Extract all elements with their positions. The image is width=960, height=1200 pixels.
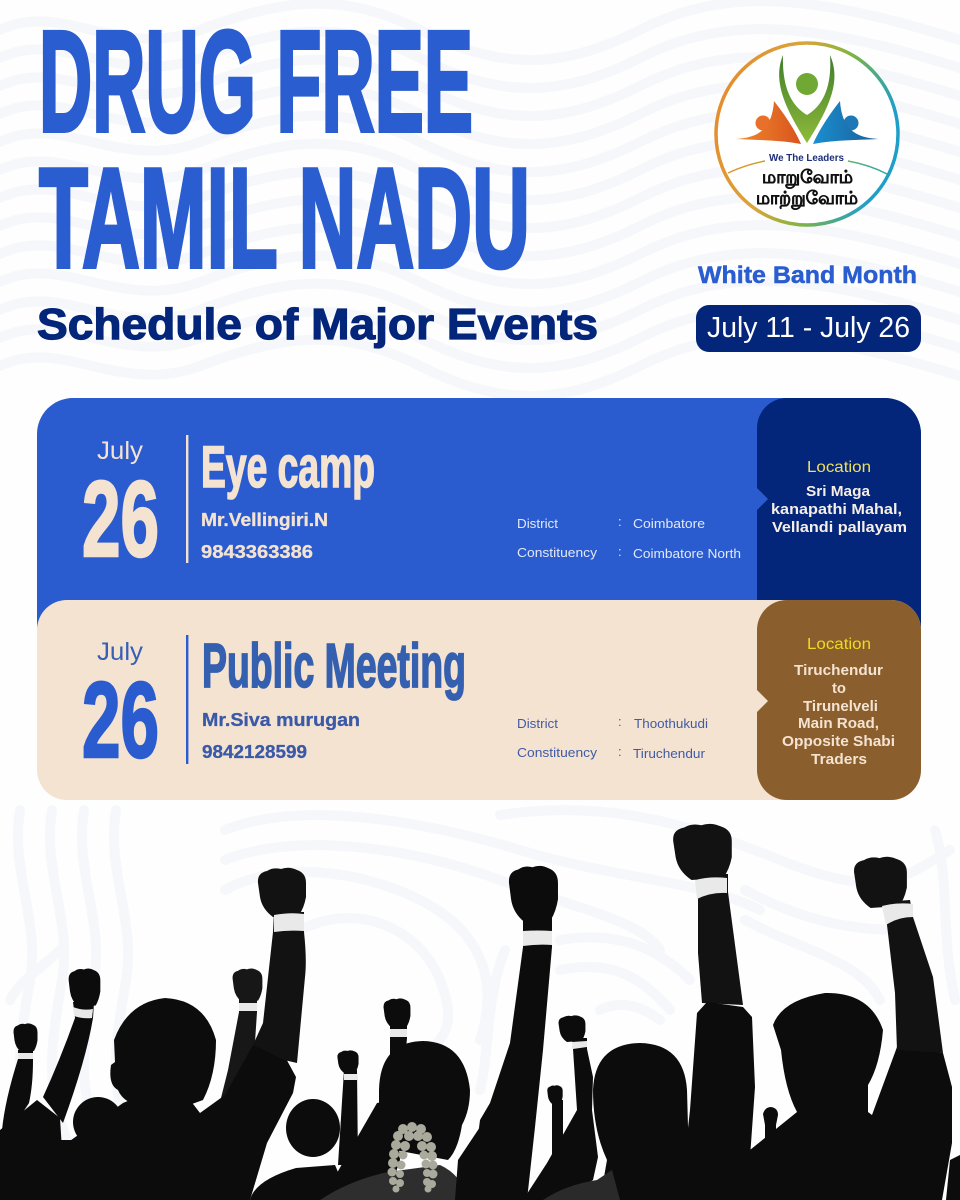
location text: Traders [811, 751, 867, 768]
subtitle: schedule of major events: Schedule of Major Events [37, 300, 598, 349]
panel: public meeting [37, 600, 921, 800]
location text [771, 459, 907, 536]
contact: Mr.Siva murugan [202, 710, 360, 730]
blue card background [37, 398, 921, 660]
location text: Tiruchendur [794, 662, 883, 679]
location text: Location [807, 459, 871, 476]
location text: kanapathi Mahal, [771, 501, 902, 518]
main man head [110, 998, 216, 1112]
location text: Vellandi pallayam [772, 519, 907, 536]
location tab background [757, 398, 921, 660]
logo: We The Leaders [716, 43, 898, 225]
district details [517, 514, 741, 561]
district details: District [517, 516, 558, 531]
district details [517, 714, 708, 761]
location text: Opposite Shabi [782, 733, 895, 750]
district details: Constituency [517, 545, 598, 560]
beige card background [37, 600, 921, 800]
district details: Constituency [517, 745, 598, 760]
hair between shoulders [455, 1127, 495, 1200]
edge figure [946, 1155, 960, 1200]
sleeve right of second woman [680, 1002, 755, 1200]
logo ring [716, 43, 898, 225]
far left arm and fist [2, 1023, 38, 1135]
event name: Eye camp [201, 435, 375, 500]
second woman head and body [593, 1043, 690, 1200]
logo Tamil text: மாற்றுவோம் [756, 188, 858, 210]
district details: : [618, 514, 622, 529]
panel: eye camp [37, 398, 921, 660]
title: Drug Free Tamil Nadu [39, 1, 530, 298]
far right raised arm and fist [854, 857, 943, 1053]
contact [202, 710, 360, 762]
logo figure: blue right [813, 101, 879, 144]
location text: Tirunelveli [803, 698, 878, 715]
second woman shoulder [543, 1170, 620, 1200]
small fist arm [523, 1015, 598, 1200]
title: Drug Free Tamil Nadu: TAMIL NADU [39, 139, 530, 298]
district details: Thoothukudi [634, 716, 708, 731]
district details: District [517, 716, 558, 731]
crowd silhouette with raised fists and white bands [0, 824, 960, 1200]
flower garland [388, 1122, 438, 1192]
right man body [745, 1047, 952, 1200]
date: July 26 [82, 638, 159, 780]
date: July 26 [82, 437, 159, 579]
district details: Coimbatore [633, 516, 705, 531]
central fist arm [384, 998, 410, 1060]
event name: Public Meeting [202, 632, 466, 701]
contact: Mr.Vellingiri.N [201, 510, 328, 530]
right man head [773, 993, 883, 1115]
heading: white band month: White Band Month [698, 262, 917, 289]
district details: : [618, 544, 622, 559]
contact [201, 510, 328, 562]
location tab background [757, 600, 921, 800]
woman head [379, 1041, 470, 1160]
white wrist bands [18, 877, 913, 1080]
contact: 9842128599 [202, 742, 307, 762]
district details: Coimbatore North [633, 546, 741, 561]
district details: Tiruchendur [633, 746, 706, 761]
location text [782, 636, 895, 768]
date: July 26: 26 [82, 458, 159, 579]
main raised arm and fist [253, 868, 306, 1063]
date pill: July 11 - July 26 [707, 312, 910, 344]
logo figure: orange left [735, 101, 801, 144]
date: July 26: 26 [82, 659, 159, 780]
tiny far fist [547, 1085, 563, 1157]
right raised arm and fist [673, 824, 743, 1005]
location text: Sri Maga [806, 483, 871, 500]
small central arm [337, 1050, 359, 1165]
main man body [20, 1045, 296, 1200]
district details: : [618, 744, 622, 759]
location text: Location [807, 636, 871, 653]
tiny right fist [763, 1107, 778, 1150]
district details: : [618, 714, 622, 729]
date: July 26: July [97, 437, 144, 465]
logo Tamil text [756, 167, 858, 210]
logo figure: green centre [779, 55, 834, 143]
contact: 9843363386 [201, 542, 313, 562]
left sleeve and small head [0, 1097, 125, 1200]
date: July 26: July [97, 638, 144, 666]
left arm and fist [43, 969, 100, 1123]
sleeve behind woman [325, 1100, 400, 1200]
date pill [696, 305, 921, 352]
logo Tamil text: மாறுவோம் [762, 167, 853, 189]
woman shoulders [320, 1165, 468, 1200]
title: Drug Free Tamil Nadu: DRUG FREE [39, 1, 473, 162]
logo tagline: We The Leaders [769, 152, 844, 164]
logo arcs [728, 161, 887, 174]
raised arm and fist right of woman [470, 866, 558, 1200]
arm with fist behind main man [218, 968, 262, 1110]
middle head and body [250, 1099, 350, 1200]
location text: Main Road, [798, 715, 879, 732]
location text: to [832, 680, 846, 697]
